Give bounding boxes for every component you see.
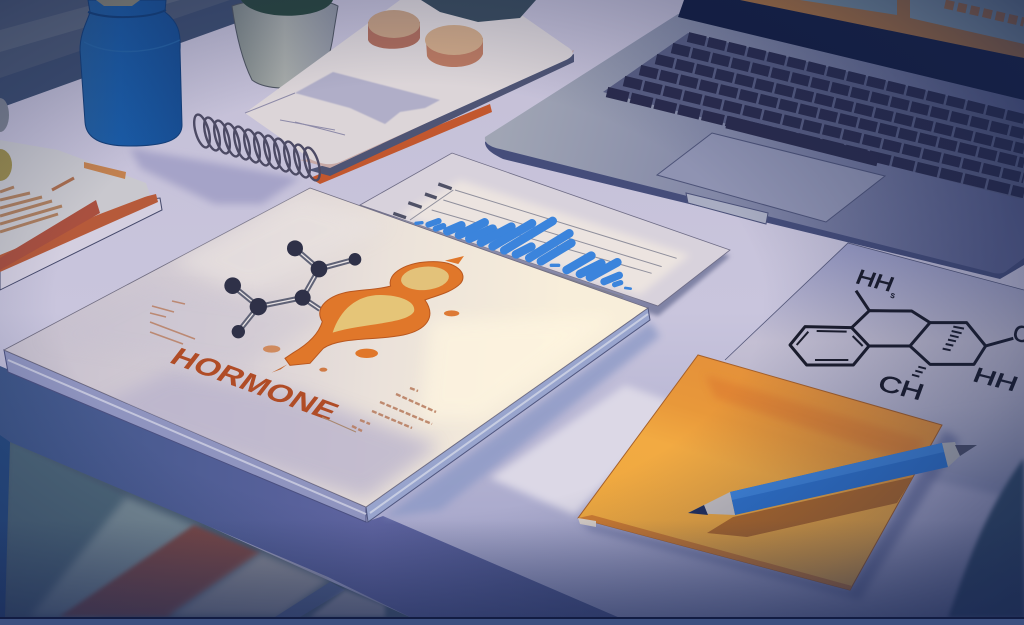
- bottom edge band: [0, 617, 1024, 625]
- chemical structure: CH: [875, 370, 928, 405]
- dark plant leaves: [421, 0, 536, 22]
- orange sticky pad: [578, 355, 960, 600]
- bar chart: [393, 184, 677, 297]
- laptop latch: [686, 193, 768, 224]
- molecule diagram: [224, 240, 361, 338]
- main hormone document: [4, 188, 650, 522]
- keyboard: [603, 33, 1024, 200]
- icon: wooden discs: [368, 10, 483, 67]
- chemical structure: HH: [970, 364, 1021, 396]
- book stack: [0, 98, 162, 290]
- blue bottle: [80, 0, 182, 146]
- chemical structure: [790, 266, 1024, 405]
- pencil shadow: [707, 477, 913, 537]
- desk front edge: [0, 366, 620, 618]
- chemical structure: s: [890, 290, 897, 300]
- lower right desk edge: [948, 458, 1024, 618]
- title: HORMONE: HORMONE: [164, 343, 345, 426]
- notebook shadow: [295, 72, 440, 124]
- notebook covers: [310, 104, 492, 184]
- blue pencil: [688, 442, 977, 515]
- trackpad: [657, 133, 885, 222]
- chemical structure sheet: [725, 243, 1024, 500]
- spiral binding: [191, 113, 323, 182]
- book bar stripes: [0, 187, 62, 232]
- back wall: [0, 0, 300, 108]
- chemical structure: HH: [852, 266, 897, 296]
- spiral notebook: [191, 0, 574, 184]
- plant pot: [232, 0, 338, 88]
- laptop: [485, 0, 1024, 279]
- laptop screen hinge: [678, 0, 1024, 100]
- pad band shading: [705, 375, 925, 462]
- paper with bar chart: [358, 153, 730, 316]
- floor with reflections: [0, 432, 412, 618]
- desk shading next to document: [130, 148, 680, 518]
- hormone blob graphic: [263, 256, 464, 373]
- small caption marks left: [150, 301, 195, 344]
- laptop screen: [740, 0, 1024, 58]
- small caption marks right: [352, 388, 436, 431]
